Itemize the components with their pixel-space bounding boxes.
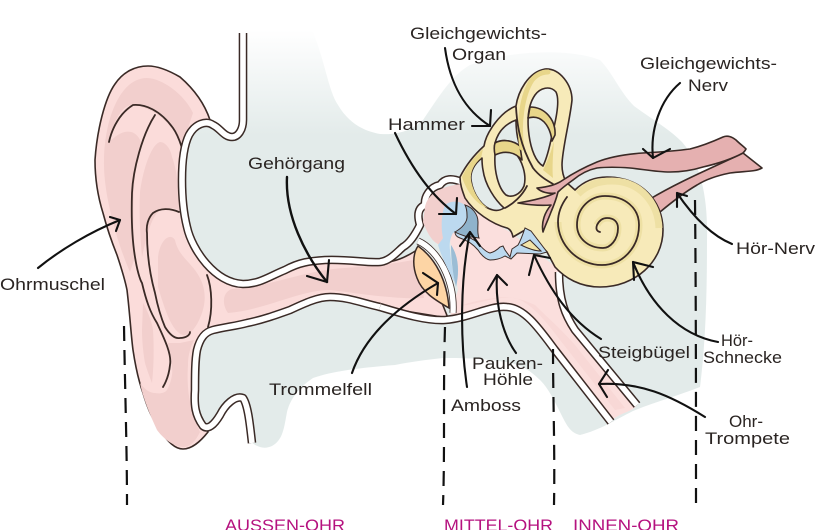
label: Steigbügel: Steigbügel xyxy=(598,344,690,362)
label: Hör-Nerv: Hör-Nerv xyxy=(736,240,815,258)
hammer light part xyxy=(438,202,468,283)
label: Hör-Schnecke: Schnecke xyxy=(703,349,782,367)
cavity floor shading xyxy=(460,297,625,410)
dashed line: inner ear right xyxy=(695,200,696,505)
label: Ohr-Trompete xyxy=(705,413,790,448)
lobe shading xyxy=(140,340,200,447)
upper canal wall white xyxy=(182,33,462,284)
superior canal stem shade xyxy=(543,140,554,178)
upper canal wall dark xyxy=(182,33,462,284)
label: Ohrmuschel: Ohrmuschel xyxy=(0,276,105,294)
label: Pauken-Höhle: Höhle xyxy=(483,371,533,389)
superior canal inner wall line xyxy=(516,107,553,184)
eardrum membrane band xyxy=(418,241,453,313)
canal shading xyxy=(224,259,424,313)
superior canal shade xyxy=(520,72,548,148)
arrow: Ohrmuschel xyxy=(38,217,120,268)
arrow: Hammer xyxy=(395,133,457,214)
arrow: Pauken-Höhle xyxy=(488,275,516,353)
arrow: Ohr-Trompete xyxy=(599,370,705,417)
anvil dark part xyxy=(455,205,479,238)
dashed line: outer ear left xyxy=(124,326,127,505)
label: Hammer: Hammer xyxy=(388,116,466,134)
antihelix shading xyxy=(140,142,179,257)
lower canal wall white xyxy=(195,297,380,443)
upper cavity fill xyxy=(423,184,470,245)
arrow: Hör-Nerv xyxy=(677,193,732,244)
label: Gleichgewichts-Organ xyxy=(410,25,547,64)
label: Gleichgewichts-Nerv xyxy=(640,55,777,95)
lower canal wall dark xyxy=(195,297,380,443)
helix fold line xyxy=(109,105,182,148)
auricle and canal fill xyxy=(95,66,448,449)
lower middle ear wall white xyxy=(380,307,611,422)
anvil and stirrup xyxy=(455,228,547,260)
posterior canal arc seen through superior canal xyxy=(528,107,555,141)
vestibular nerve with branches xyxy=(518,136,746,232)
arrow: Hör-Schnecke xyxy=(633,262,718,342)
panel: ossicles xyxy=(438,202,547,287)
arrow: Steigbügel xyxy=(529,255,601,339)
antihelix line xyxy=(132,115,170,387)
posterior canal inner wall line xyxy=(505,186,527,208)
arrow: Gleichgewichts-Organ xyxy=(445,48,491,126)
concha shading xyxy=(158,237,205,335)
eustachian tube upper wall white xyxy=(559,272,637,405)
cochlea spiral line xyxy=(558,196,639,265)
cochlear nerve xyxy=(650,153,762,212)
label: Hör-Schnecke xyxy=(703,332,782,367)
tympanic cavity fill xyxy=(450,205,637,420)
label: Pauken-Höhle xyxy=(472,355,543,389)
label: Gleichgewichts-Nerv: Nerv xyxy=(688,77,729,95)
eardrum membrane white xyxy=(418,241,453,313)
label: Gleichgewichts-Organ: Organ xyxy=(452,46,506,64)
label: Gleichgewichts-Organ: Gleichgewichts- xyxy=(410,25,547,43)
dashed line: middle ear left xyxy=(443,327,445,505)
helix and rim shading xyxy=(104,78,193,272)
tragus line xyxy=(207,275,211,327)
arrow: Gleichgewichts-Nerv xyxy=(643,83,680,158)
panel: middle ear cavity xyxy=(380,184,637,422)
label: Pauken-Höhle: Pauken- xyxy=(472,355,543,373)
label: Hör-Schnecke: Hör- xyxy=(721,332,753,350)
lateral canal shade xyxy=(462,149,488,208)
label: Gehörgang: Gehörgang xyxy=(248,155,345,173)
panel: outer ear and ear canal xyxy=(95,33,462,449)
label: Amboss: Amboss xyxy=(451,397,521,415)
arrow: Gehörgang xyxy=(287,177,329,282)
cochlea rim shade xyxy=(578,181,659,228)
arrow: Trommelfell xyxy=(352,273,438,373)
label: Ohr-Trompete: Ohr- xyxy=(729,413,763,431)
stirrup opening xyxy=(521,240,541,251)
lower middle ear wall dark xyxy=(380,307,611,422)
panel: inner ear bone xyxy=(460,69,746,287)
label: Gleichgewichts-Nerv: Gleichgewichts- xyxy=(640,55,777,73)
label: Trommelfell: Trommelfell xyxy=(269,381,372,399)
lobe stripe shading xyxy=(142,303,154,383)
head background shape xyxy=(185,30,707,448)
cochlea spiral shade xyxy=(558,196,639,265)
hammer darker stripe xyxy=(451,245,458,287)
lateral canal crossing band xyxy=(494,141,522,160)
eustachian tube upper wall dark xyxy=(559,272,637,405)
dashed line: middle ear right xyxy=(553,349,554,505)
labyrinth and cochlea body xyxy=(460,69,663,287)
arrow: Amboss xyxy=(460,232,480,387)
eardrum xyxy=(414,246,449,308)
concha line xyxy=(147,209,190,338)
label: Ohr-Trompete: Trompete xyxy=(705,430,790,448)
